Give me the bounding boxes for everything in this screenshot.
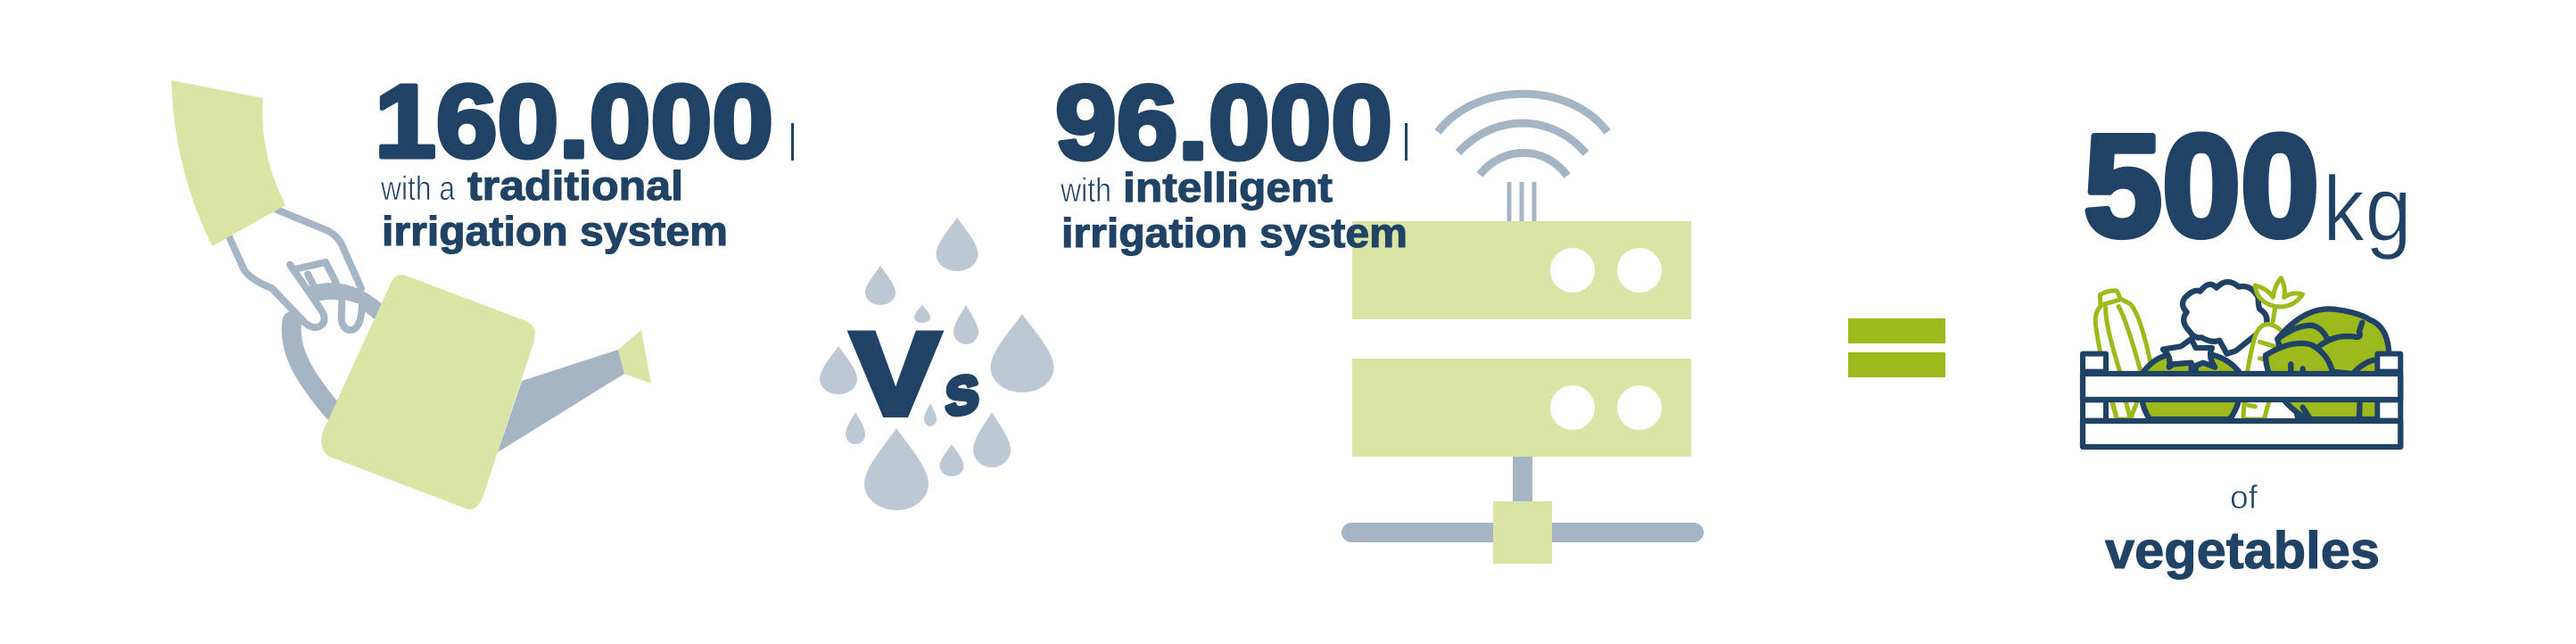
indicator lights: [1550, 248, 1662, 430]
number: 500: 500: [2084, 105, 2319, 267]
heading: s: s: [945, 350, 979, 432]
label: of: of: [2230, 479, 2258, 516]
network stem: [1513, 457, 1532, 503]
number: 160.000: 160.000: [375, 63, 773, 179]
panel: intelligent irrigation: [1055, 64, 1704, 564]
label: irrigation system: irrigation system: [1061, 210, 1408, 256]
cucumber: [2095, 291, 2151, 419]
crate posts: [2083, 354, 2400, 421]
can body: [321, 275, 535, 509]
panel: versus: [820, 218, 1054, 510]
nozzle: [618, 330, 651, 384]
panel: result: [2083, 105, 2412, 580]
label: with intelligent: with: [1060, 172, 1111, 210]
icon: vegetable crate: [2083, 278, 2400, 447]
heading: Vs: V: [852, 309, 939, 439]
cauliflower: [2183, 282, 2266, 354]
panel: traditional irrigation: [171, 63, 794, 509]
label: with a traditional: with a: [380, 170, 456, 208]
icon: hand holding watering can: [171, 80, 651, 509]
crate slats: [2083, 374, 2400, 447]
icon: server with wifi: [1342, 94, 1704, 564]
unit: kg: kg: [2323, 158, 2412, 261]
icon: equals sign: [1848, 318, 1945, 377]
label: with intelligent: intelligent: [1123, 164, 1333, 211]
label: irrigation system: irrigation system: [382, 208, 728, 254]
wifi arcs: [1438, 94, 1607, 221]
hand outline: [229, 210, 362, 330]
label: with a traditional: traditional: [467, 162, 683, 209]
watering can handle: [292, 291, 381, 422]
carrot: [2243, 278, 2303, 419]
cabbage: [2266, 309, 2389, 419]
label: vegetables: vegetables: [2105, 522, 2380, 580]
network node: [1493, 501, 1552, 564]
number: 96.000: 96.000: [1055, 64, 1392, 182]
sleeve: [171, 80, 285, 246]
server unit bottom: [1352, 359, 1691, 457]
icon: water drops: [820, 218, 1054, 510]
text cursor: [791, 123, 794, 161]
server unit top: [1352, 221, 1691, 319]
text cursor: [1405, 123, 1408, 161]
spout: [498, 350, 624, 452]
tomato: [2141, 339, 2241, 419]
network bar: [1342, 523, 1704, 542]
